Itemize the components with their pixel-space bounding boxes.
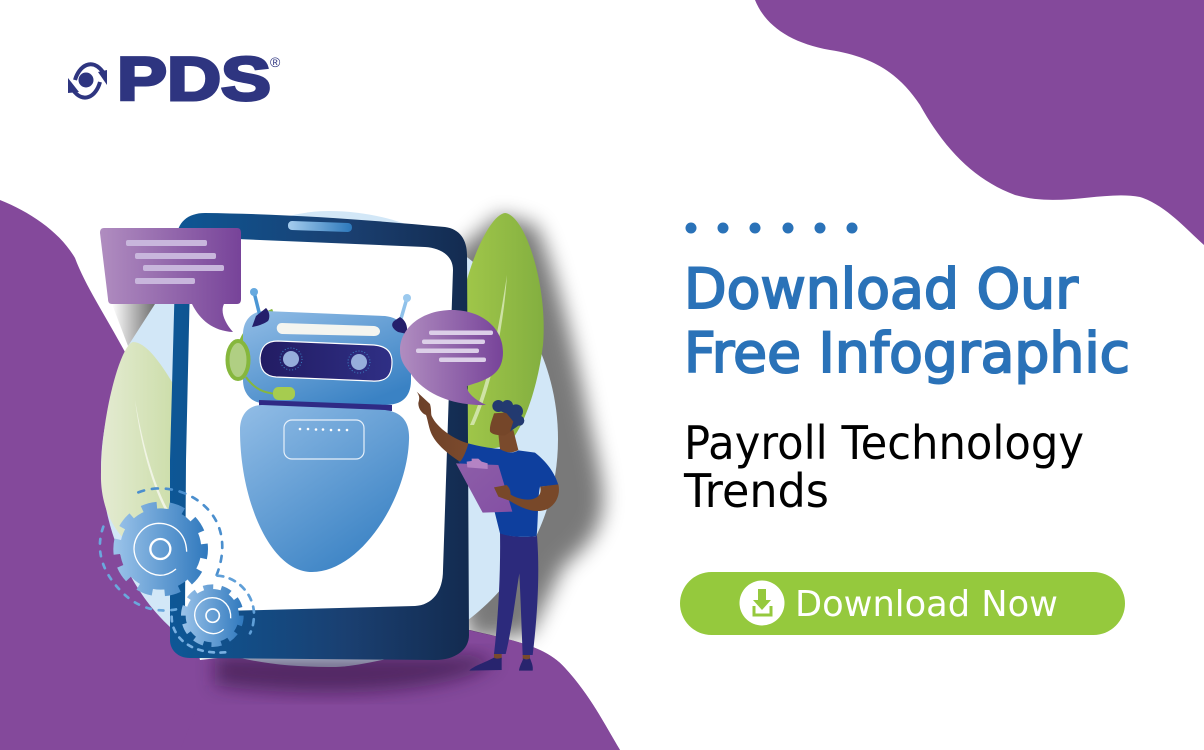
- person legs: [494, 533, 538, 655]
- robot visor: [260, 341, 392, 381]
- phone screen: [185, 237, 453, 612]
- phone: [170, 213, 469, 660]
- shadow on purple: [215, 655, 495, 693]
- logo registered mark: ®: [270, 54, 281, 70]
- background: top right purple blob: [755, 0, 1204, 245]
- person shirt: [458, 443, 558, 537]
- robot headset ear: [228, 341, 248, 379]
- gears: [100, 488, 254, 653]
- download button: [680, 572, 1125, 635]
- background: left purple blob: [0, 200, 620, 750]
- person raised arm: [417, 392, 468, 462]
- logo eye icon: [68, 64, 107, 98]
- robot antenna right: [392, 294, 411, 334]
- speech bubble right: [400, 310, 503, 405]
- left leaf vein: [135, 400, 168, 510]
- subtitle: Payroll Technology: [684, 416, 1084, 470]
- title: [684, 257, 1130, 385]
- small gear: [184, 588, 240, 644]
- button label: Download Now: [795, 584, 1058, 625]
- person hair: [492, 400, 524, 432]
- robot forehead highlight: [277, 323, 380, 336]
- person: [417, 392, 559, 671]
- subtitle: [683, 416, 1084, 518]
- robot head: [243, 311, 411, 405]
- large gear arcs: [134, 523, 187, 575]
- person ankles: [494, 653, 530, 659]
- logo wordmark: PDS: [117, 45, 271, 113]
- leaf vein: [470, 275, 507, 425]
- robot eyes: [283, 351, 367, 370]
- logo: PDS: [68, 45, 281, 113]
- speech bubble left: [100, 228, 241, 332]
- phone body: [170, 213, 469, 660]
- bubble text lines: [416, 330, 493, 362]
- shadow under speech bubble left: [112, 304, 160, 346]
- left leaf: [101, 342, 178, 548]
- person head: [490, 412, 516, 435]
- bubble shape: [100, 228, 241, 332]
- person clipboard: [456, 459, 512, 513]
- person forearm and hand: [494, 484, 559, 511]
- dashed orbits: [100, 488, 254, 653]
- bubble text lines: [126, 240, 224, 284]
- robot: [228, 288, 411, 572]
- download icon: [740, 580, 784, 626]
- robot neck bar: [259, 400, 392, 411]
- small gear arcs: [195, 598, 231, 634]
- robot headset band: [241, 311, 273, 342]
- drop shadow of phone: [400, 215, 603, 640]
- robot microphone: [246, 377, 295, 400]
- subtitle: Trends: [683, 464, 829, 518]
- phone speaker: [288, 221, 352, 232]
- robot body: [240, 405, 409, 572]
- large gear: [118, 506, 203, 592]
- background circle: [101, 211, 558, 667]
- bubble shape: [400, 310, 503, 405]
- title: Free Infographic: [684, 321, 1130, 385]
- circle wedge near left bubble: [128, 304, 172, 392]
- purple foreground under person: [180, 630, 620, 750]
- person neck: [498, 430, 518, 452]
- right leaf: [460, 213, 544, 448]
- robot antenna left: [250, 288, 269, 327]
- title: Download Our: [684, 257, 1078, 321]
- robot chest panel: [284, 420, 364, 459]
- person shoes: [469, 658, 533, 671]
- decorative dots: [686, 222, 858, 234]
